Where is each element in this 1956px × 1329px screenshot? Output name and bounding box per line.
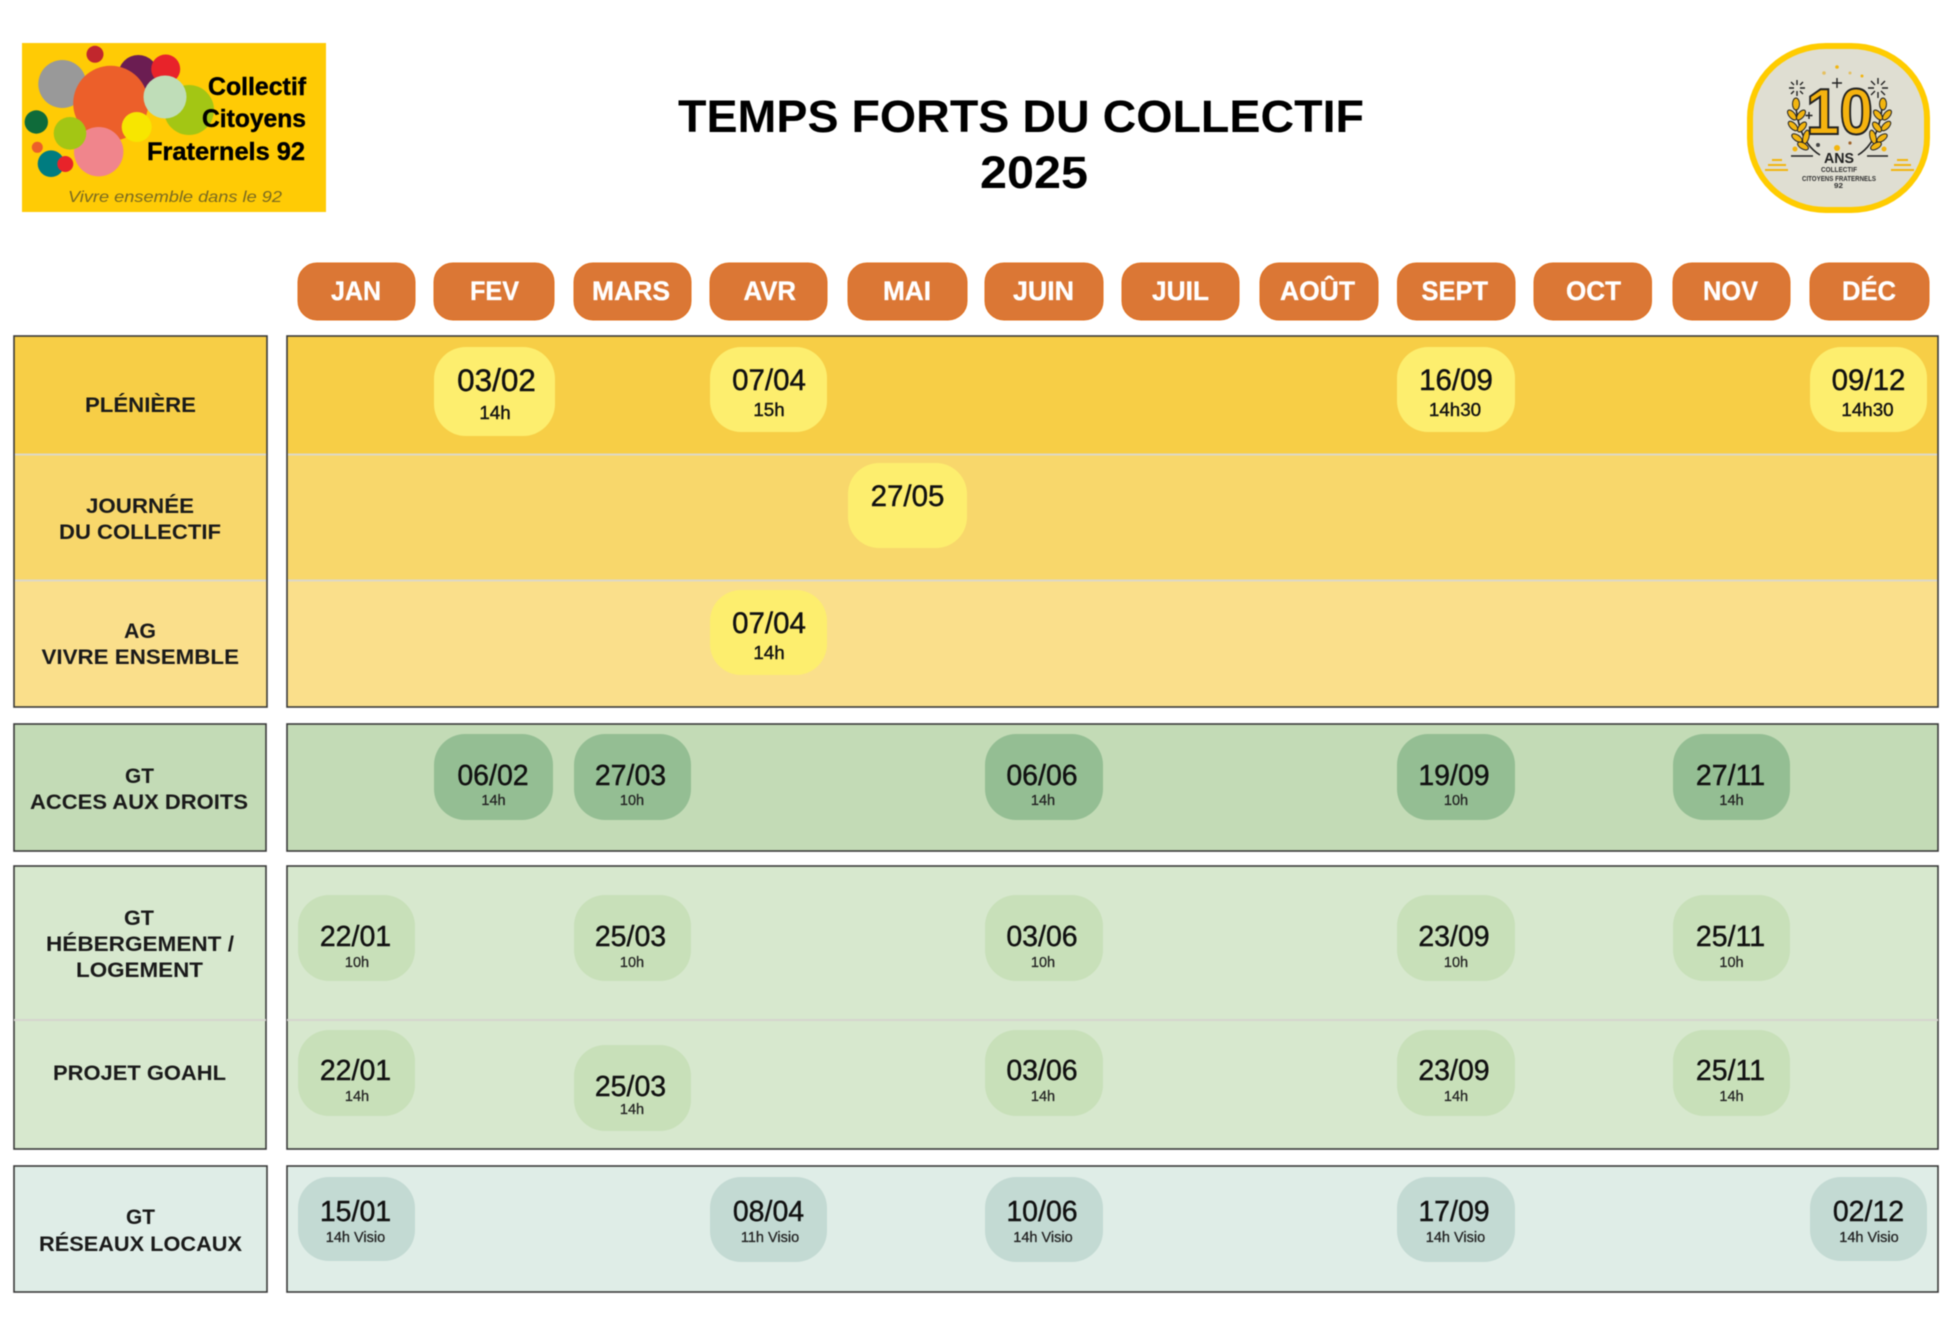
label: AG Vivre ensemble [42,619,239,669]
date: 25/11 Goahl [1673,1030,1790,1116]
month: AOUT: AOÛT [1280,275,1355,306]
date: 27/05 [848,463,967,548]
date: 23/09 Goahl: 23/09 [1418,1055,1490,1087]
logo: Collectif Citoyens Fraternels 92: Fraternels 92 [147,138,305,166]
panel: hébergement and Goahl labels [14,866,266,1149]
month: AVR [710,263,827,320]
date: 25/03 hébergement: 25/03 [595,921,666,953]
date: 03/02: 14h [479,402,511,423]
date: 27/11 [1673,734,1790,820]
date: 03/06 hébergement [985,895,1103,981]
month: JAN: JAN [331,276,381,306]
date: 03/06 hébergement: 03/06 [1006,921,1078,953]
date: 23/09 hébergement: 23/09 [1418,921,1490,953]
month: JUIN: JUIN [1013,276,1074,306]
month: DEC [1810,263,1929,320]
date: 27/11: 14h [1719,793,1744,809]
panel: yellow row labels [14,336,267,707]
title [678,91,1364,198]
title: 2025 [980,147,1088,198]
date: 25/11 hébergement: 10h [1719,955,1744,971]
date: 17/09: 17/09 [1418,1196,1490,1228]
month: MAI [848,263,967,320]
panel: GT réseaux locaux label [14,1166,267,1292]
date: 06/02: 14h [481,793,506,809]
date: 25/03 hébergement: 10h [620,955,644,971]
month: AOUT [1260,263,1378,320]
date: 27/05: 27/05 [871,480,944,513]
label: GT hébergement logement [46,906,234,982]
date: 16/09: 14h30 [1429,399,1481,420]
date: 10/06 [985,1177,1103,1262]
date: 06/06: 14h [1031,793,1055,809]
date: 25/11 Goahl: 14h [1719,1089,1744,1105]
panel: GT accès aux droits timeline [287,724,1938,851]
date: 25/11 hébergement: 25/11 [1696,921,1765,953]
date: 27/11: 27/11 [1696,760,1765,792]
label: Plénière: PLÉNIÈRE [85,392,196,417]
month: MARS [574,263,691,320]
date: 19/09: 19/09 [1418,760,1490,792]
panel: GT accès aux droits label: ACCES AUX DROITS [30,790,248,814]
panel: GT réseaux locaux timeline [287,1166,1938,1292]
date: 16/09 [1397,347,1515,432]
date: 07/04 AG: 14h [753,642,785,663]
date: 06/02 [434,734,553,820]
date: 08/04: 08/04 [733,1196,804,1228]
date: 08/04 [710,1177,827,1262]
date: 22/01 Goahl: 22/01 [320,1055,391,1087]
date: 22/01 Goahl [298,1030,415,1116]
month: FEV [434,263,554,320]
badge: 10 ans: 92 [1834,183,1843,190]
date: 22/01 hébergement: 10h [345,955,369,971]
date: 15/01: 14h Visio [326,1230,385,1246]
date: 23/09 hébergement [1397,895,1515,981]
label: GT hébergement logement: LOGEMENT [76,958,203,982]
date: 25/03 Goahl: 25/03 [595,1071,666,1103]
badge: 10 ans: CITOYENS FRATERNELS [1802,174,1876,183]
date: 03/06 Goahl: 14h [1031,1089,1055,1105]
month: SEPT [1398,263,1515,320]
title: TEMPS FORTS DU COLLECTIF [678,91,1364,142]
date: 02/12 [1810,1177,1927,1261]
date: 07/04 AG [710,590,827,675]
logo: Collectif Citoyens Fraternels 92: Collectif [208,73,307,101]
date: 10/06: 10/06 [1006,1196,1078,1228]
date: 03/06 Goahl: 03/06 [1006,1055,1078,1087]
badge: 10 ans: ANS [1824,150,1854,167]
label: AG Vivre ensemble: VIVRE ENSEMBLE [42,645,239,669]
month: AVR: AVR [744,276,796,306]
badge: 10 ans: COLLECTIF [1821,165,1857,174]
date: 08/04: 11h Visio [741,1230,799,1246]
logo: Collectif Citoyens Fraternels 92 [22,43,326,212]
month: JAN [298,263,415,320]
panel: GT accès aux droits label [14,724,266,851]
date: 19/09 [1397,734,1515,820]
date: 03/02 [434,347,555,436]
panel: GT accès aux droits label: GT [125,764,154,788]
month: OCT: OCT [1566,276,1621,306]
date: 03/02: 03/02 [457,362,536,398]
date: 22/01 hébergement [298,895,415,981]
date: 17/09: 14h Visio [1426,1230,1485,1246]
date: 23/09 hébergement: 10h [1444,955,1468,971]
month headers [298,263,1929,320]
panel: yellow timeline [287,336,1938,707]
date: 07/04 plénière [710,347,827,432]
panel: GT réseaux locaux label: RÉSEAUX LOCAUX [39,1231,243,1256]
date: 23/09 Goahl [1397,1030,1515,1116]
label: Journée du collectif: DU COLLECTIF [59,520,221,544]
label: AG Vivre ensemble: AG [124,619,156,643]
date: 25/03 hébergement [574,895,691,981]
date: 27/03 [574,734,691,820]
date: 09/12 [1810,347,1927,432]
label: Journée du collectif: JOURNÉE [86,493,194,518]
panel: hébergement and Goahl timeline [287,866,1938,1149]
month: JUIN [985,263,1103,320]
month: DEC: DÉC [1842,275,1896,306]
date: 25/03 Goahl: 14h [620,1102,644,1118]
date: 07/04 AG: 07/04 [732,607,806,640]
month: JUIL: JUIL [1152,276,1209,306]
date: 06/02: 06/02 [457,760,529,792]
date: 06/06: 06/06 [1006,760,1078,792]
date: 10/06: 14h Visio [1013,1230,1073,1246]
logo: Collectif Citoyens Fraternels 92: Citoyens [202,105,306,133]
date: 07/04 plénière: 15h [753,399,785,420]
date: 16/09: 16/09 [1419,364,1493,397]
month: MAI: MAI [883,276,931,306]
date: 22/01 Goahl: 14h [345,1089,369,1105]
badge: 10 ans: 10 [1806,75,1873,148]
date: 09/12: 14h30 [1841,399,1894,420]
date: 02/12: 02/12 [1833,1196,1904,1228]
month: FEV: FEV [470,276,519,306]
panel: GT réseaux locaux label: GT [126,1205,155,1229]
logo: Collectif Citoyens Fraternels 92: Vivre ensemble dans le 92 [68,189,282,206]
date: 27/03: 27/03 [595,760,666,792]
date: 25/03 Goahl [574,1045,691,1131]
date: 15/01: 15/01 [320,1196,391,1228]
date: 25/11 Goahl: 25/11 [1696,1055,1765,1087]
date: 03/06 hébergement: 10h [1031,955,1055,971]
month: JUIL [1122,263,1239,320]
date: 22/01 hébergement: 22/01 [320,921,391,953]
date: 02/12: 14h Visio [1839,1230,1899,1246]
label: Journée du collectif [59,493,221,544]
label: GT hébergement logement: GT [124,906,154,930]
badge: 10 ans [1750,46,1927,210]
month: NOV: NOV [1703,276,1758,306]
date: 27/03: 10h [620,793,644,809]
date: 17/09 [1397,1177,1515,1262]
label: Projet Goahl: PROJET GOAHL [53,1061,226,1085]
month: NOV [1673,263,1790,320]
month: OCT [1534,263,1652,320]
date: 15/01 [298,1177,415,1261]
label: GT hébergement logement: HÉBERGEMENT / [46,931,234,956]
date: 06/06 [985,734,1103,820]
date: 19/09: 10h [1444,793,1468,809]
date: 07/04 plénière: 07/04 [732,364,806,397]
month: SEPT: SEPT [1422,276,1488,306]
month: MARS: MARS [592,276,670,306]
date: 23/09 Goahl: 14h [1444,1089,1468,1105]
date: 03/06 Goahl [985,1030,1103,1116]
date: 25/11 hébergement [1673,895,1790,981]
date: 09/12: 09/12 [1832,364,1905,397]
